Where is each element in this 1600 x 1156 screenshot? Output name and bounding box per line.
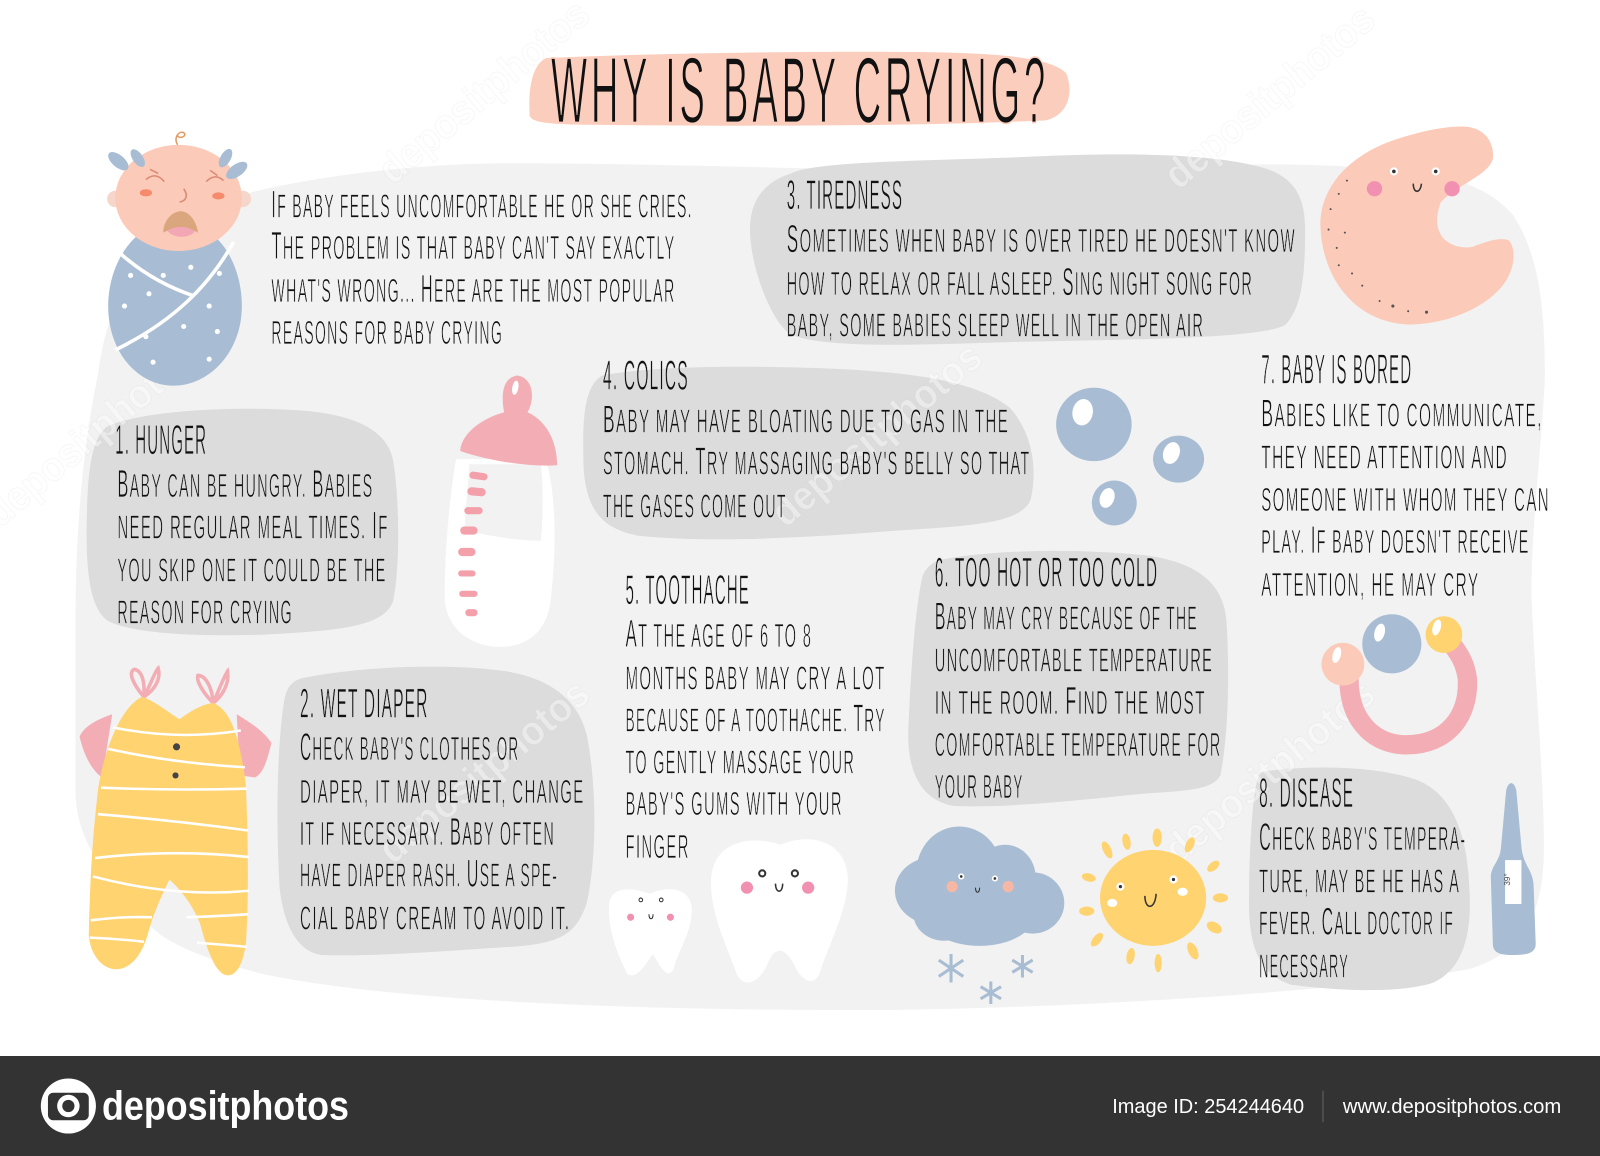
- text: 2. wet diaper: [300, 679, 585, 937]
- text: 1. hunger: 1. HUNGER: [115, 416, 207, 463]
- text: 4. colics: 4. COLICS: [603, 352, 689, 399]
- icon: medicine ampoule: [1491, 783, 1536, 955]
- text: 2. wet diaper: HAVE DIAPER RASH. USE A SPE-: [300, 853, 558, 896]
- text: 2. wet diaper: IT IF NECESSARY. BABY OFTEN: [300, 811, 555, 854]
- text: 5. toothache: AT THE AGE OF 6 TO 8: [626, 613, 812, 656]
- text: DIAPER, IT MAY BE WET, CHANGE: [300, 774, 585, 811]
- bubble: too hot or too cold: [908, 551, 1228, 806]
- bubble: tiredness: [750, 154, 1305, 345]
- icon: teeth: [609, 839, 848, 982]
- watermarks: [0, 0, 1384, 872]
- text: 3. tiredness: HOW TO RELAX OR FALL ASLEEP. SING NIGHT SONG FOR: [787, 261, 1253, 304]
- text: 4. colics: STOMACH. TRY MASSAGING BABY'S BELLY SO THAT: [603, 440, 1031, 483]
- icon: bubbles: [1056, 388, 1204, 525]
- bubble: colics: [583, 367, 1034, 539]
- icon: medicine ampoule: 39°: [1503, 873, 1512, 886]
- text: 2. wet diaper: CHECK BABY'S CLOTHES OR: [300, 726, 519, 769]
- text: YOU SKIP ONE IT COULD BE THE: [117, 553, 387, 590]
- text: 7. baby is bored: [1261, 346, 1550, 604]
- text: 6. too hot or too cold: IN THE ROOM. FIND THE MOST: [935, 680, 1206, 723]
- text: 3. tiredness: 3. TIREDNESS: [787, 171, 903, 218]
- website: www.depositphotos.com: [1342, 1096, 1561, 1118]
- bubble: wet diaper: [277, 667, 594, 955]
- text: intro: REASONS FOR BABY CRYING: [271, 315, 503, 352]
- watermarks: depositphotos: [762, 333, 991, 535]
- text: 6. too hot or too cold: [935, 549, 1221, 806]
- title: [529, 37, 1070, 142]
- icon: depositphotos logo: [41, 1078, 96, 1134]
- text: 6. too hot or too cold: YOUR BABY: [935, 769, 1023, 806]
- text: BABY MAY HAVE BLOATING DUE TO GAS IN THE: [603, 399, 1009, 442]
- text: 5. toothache: BABY'S GUMS WITH YOUR: [626, 786, 843, 823]
- text: 8. disease: [1259, 769, 1466, 985]
- icon: sun: [1079, 828, 1228, 972]
- text: BABY MAY CRY BECAUSE OF THE: [935, 596, 1198, 639]
- text: THE PROBLEM IS THAT BABY CAN'T SAY EXACTLY: [271, 225, 676, 268]
- watermarks: depositphotos: [1155, 670, 1384, 872]
- icon: yellow onesie: [80, 668, 271, 975]
- image id: Image ID: 254244640: [1112, 1096, 1304, 1118]
- icon: crying swaddled baby: [105, 132, 251, 386]
- text: 1. hunger: REASON FOR CRYING: [117, 594, 293, 631]
- title highlight: [529, 52, 1070, 126]
- text: COMFORTABLE TEMPERATURE FOR: [935, 727, 1221, 764]
- icon: cloud with snowflakes: [895, 826, 1064, 1004]
- text: 2. wet diaper: 2. WET DIAPER: [300, 679, 429, 726]
- bubble: hunger: [87, 409, 398, 635]
- bubble: disease: [1249, 768, 1470, 990]
- text: BECAUSE OF A TOOTHACHE. TRY: [626, 698, 886, 741]
- background blob panel: [76, 163, 1545, 1010]
- logo wordmark: depositphotos: [102, 1082, 349, 1128]
- icon: baby bottle: [445, 375, 557, 647]
- text: 6. TOO HOT OR TOO COLD: [935, 549, 1158, 596]
- text: UNCOMFORTABLE TEMPERATURE: [935, 642, 1213, 679]
- text: 3. tiredness: [787, 171, 1296, 345]
- text: CIAL BABY CREAM TO AVOID IT.: [300, 900, 570, 937]
- text: IF BABY FEELS UNCOMFORTABLE HE OR SHE CRIES.: [271, 183, 693, 226]
- text: 4. colics: THE GASES COME OUT: [603, 488, 787, 525]
- text: 5. toothache: 5. TOOTHACHE: [626, 566, 750, 613]
- text: 1. hunger: BABY CAN BE HUNGRY. BABIES: [117, 463, 373, 506]
- text: 1. hunger: [115, 416, 389, 631]
- text: TO GENTLY MASSAGE YOUR: [626, 744, 855, 781]
- text: 5. toothache: [626, 566, 886, 866]
- text: 5. toothache: FINGER: [626, 829, 690, 866]
- text: intro: [271, 183, 693, 352]
- text: 4. colics: [603, 352, 1031, 525]
- footer bar: [0, 1056, 1600, 1156]
- icon: moon: [1320, 127, 1514, 324]
- text: MONTHS BABY MAY CRY A LOT: [626, 661, 886, 698]
- text: 8. disease: NECESSARY: [1259, 948, 1349, 985]
- text: NEED REGULAR MEAL TIMES. IF: [117, 505, 389, 548]
- watermarks: depositphotos: [369, 670, 598, 872]
- text: 8. disease: 8. DISEASE: [1259, 769, 1354, 816]
- text: intro: WHAT'S WRONG... HERE ARE THE MOST POPULAR: [271, 268, 676, 311]
- icon: rattle: [1321, 614, 1467, 745]
